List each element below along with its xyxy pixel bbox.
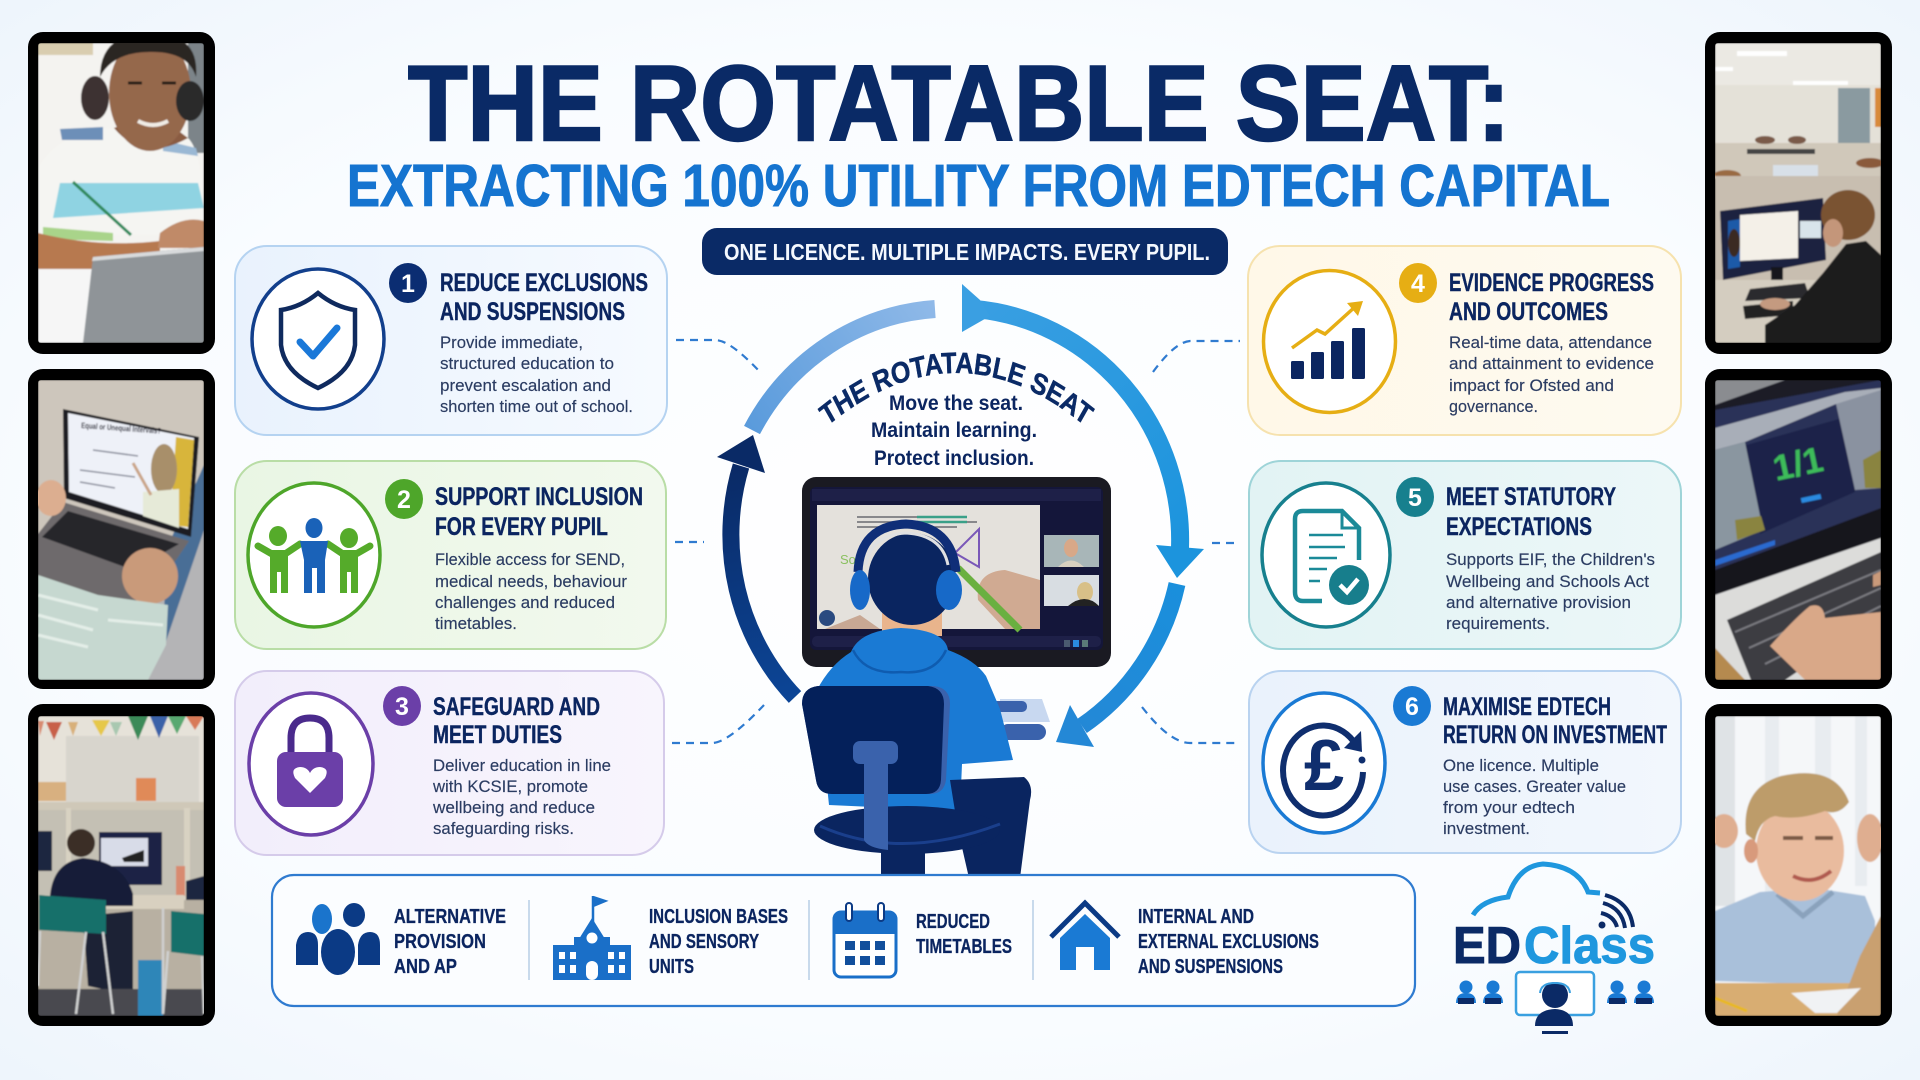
label: AND SUSPENSIONS [1138, 956, 1283, 978]
body text: use cases. Greater value [1443, 777, 1626, 796]
lesson video: Sol [840, 552, 859, 567]
heading: AND SUSPENSIONS [440, 298, 625, 326]
icon: padlock with heart [249, 693, 373, 835]
heading [433, 693, 600, 749]
participant thumbnails [1044, 535, 1099, 606]
body text: Supports EIF, the Children's [1446, 550, 1655, 569]
wordmark: Class [1524, 917, 1655, 975]
number badge 6 [1393, 686, 1431, 726]
arrow: top-right arc [962, 284, 1204, 578]
panel: edtech return [1249, 671, 1681, 853]
photo: smiling boy [1705, 704, 1892, 1026]
centre message: Protect inclusion. [874, 447, 1034, 470]
arrow: left dark arc [717, 435, 795, 697]
label: AND SENSORY [649, 931, 759, 953]
hoodie [817, 628, 1013, 811]
screen and pupil figures [1456, 972, 1654, 1034]
label [394, 906, 506, 978]
body text [1449, 333, 1654, 416]
heading: MAXIMISE EDTECH [1443, 693, 1611, 721]
rotation ring arrows [717, 284, 1204, 747]
body text: challenges and reduced [435, 593, 615, 612]
panel: reduce exclusions [235, 246, 667, 435]
body text: wellbeing and reduce [432, 798, 595, 817]
number badge 4 [1399, 263, 1437, 303]
body text: timetables. [435, 614, 517, 633]
body text: medical needs, behaviour [435, 572, 627, 591]
number badge 1 [389, 263, 427, 303]
heading [440, 269, 648, 326]
curved heading: THE ROTATABLE SEAT [818, 352, 1095, 423]
heading [435, 483, 643, 541]
cloud outline [1473, 864, 1600, 915]
number badge 3: 3 [395, 693, 409, 721]
desk items [990, 699, 1050, 740]
photo: laptop showing quiz score [1705, 369, 1892, 689]
body text [440, 333, 633, 416]
body text: Deliver education in line [433, 756, 611, 775]
title: THE ROTATABLE SEAT: [408, 43, 1510, 163]
strapline pill [702, 228, 1228, 275]
icon: document with tick [1262, 483, 1390, 627]
icon: school [553, 896, 631, 980]
headset and head [850, 524, 962, 625]
arrow: top-left light arc [752, 309, 935, 430]
label [649, 906, 788, 978]
wordmark: ED [1453, 917, 1521, 975]
subtitle: EXTRACTING 100% UTILITY FROM EDTECH CAPITAL [347, 153, 1610, 219]
label: INCLUSION BASES [649, 906, 788, 928]
body text: governance. [1449, 397, 1538, 416]
body text [432, 756, 611, 838]
heading [1449, 269, 1654, 326]
panel: use-case strip [272, 875, 1415, 1006]
label: ALTERNATIVE [394, 906, 506, 928]
icon: calendar [834, 903, 896, 977]
legs and seat [950, 777, 1031, 878]
label: UNITS [649, 956, 694, 978]
icon: group of people [296, 903, 380, 975]
body text: shorten time out of school. [440, 397, 633, 416]
heading: MEET DUTIES [433, 721, 562, 749]
label: EXTERNAL EXCLUSIONS [1138, 931, 1319, 953]
icon: shield [252, 269, 384, 409]
label: TIMETABLES [916, 936, 1012, 958]
wordmark [1453, 917, 1655, 975]
photo: computer room [1705, 32, 1892, 354]
body text: from your edtech [1443, 798, 1575, 817]
logo: EDClass [1453, 864, 1655, 1034]
chair back [802, 686, 950, 794]
body text: One licence. Multiple [1443, 756, 1599, 775]
centre message: Move the seat. [889, 392, 1023, 415]
body text [1443, 756, 1626, 838]
body text [1446, 550, 1655, 633]
arrow: lower-right arc [1056, 584, 1177, 747]
lesson video [817, 505, 1040, 630]
panel: safeguard [235, 671, 664, 855]
panel: support inclusion [235, 461, 666, 649]
body text: Flexible access for SEND, [435, 550, 625, 569]
body text: Provide immediate, [440, 333, 583, 352]
pupil from behind [802, 524, 1050, 878]
heading: EVIDENCE PROGRESS [1449, 269, 1654, 297]
heading: EXPECTATIONS [1446, 513, 1592, 541]
body text: safeguarding risks. [433, 819, 574, 838]
body text: investment. [1443, 819, 1530, 838]
photo: laptop showing quiz score: 1/1 [1769, 438, 1827, 489]
neck [882, 612, 942, 636]
body text: and alternative provision [1446, 593, 1631, 612]
dashed connectors [672, 340, 1240, 743]
body text: structured education to [440, 354, 614, 373]
body text: prevent escalation and [440, 376, 611, 395]
label: REDUCED [916, 911, 990, 933]
panel: evidence progress [1248, 246, 1681, 435]
number badge 5: 5 [1408, 484, 1422, 512]
number badge 2 [385, 479, 423, 519]
label: PROVISION [394, 931, 486, 953]
heading: RETURN ON INVESTMENT [1443, 721, 1667, 749]
centre message: Maintain learning. [871, 419, 1037, 442]
number badge 5 [1396, 477, 1434, 517]
number badge 3 [383, 686, 421, 726]
heading: REDUCE EXCLUSIONS [440, 269, 648, 297]
label: INTERNAL AND [1138, 906, 1254, 928]
photo: boy with headphones [28, 32, 215, 354]
photo: pupil in school carrel [28, 704, 215, 1026]
heading: SUPPORT INCLUSION [435, 483, 643, 511]
photo: laptop lesson on sofa [28, 369, 215, 689]
heading: AND OUTCOMES [1449, 298, 1608, 326]
heading [1446, 483, 1616, 541]
wifi arcs [1598, 895, 1633, 928]
heading: FOR EVERY PUPIL [435, 513, 608, 541]
body text: and attainment to evidence [1449, 354, 1654, 373]
icon: pound with cycle arrow [1263, 693, 1385, 833]
body text [435, 550, 627, 633]
number badge 6: 6 [1405, 693, 1419, 721]
icon: pound with cycle arrow: £ [1304, 726, 1344, 806]
heading [1443, 693, 1667, 749]
photo: laptop lesson on sofa: Equal or Unequal Intervals? [81, 421, 161, 436]
icon: rising bar chart [1264, 270, 1396, 412]
icon: three pupils [248, 483, 380, 627]
number badge 4: 4 [1411, 270, 1425, 298]
number badge 1: 1 [401, 270, 415, 298]
strapline pill: ONE LICENCE. MULTIPLE IMPACTS. EVERY PUPIL. [724, 239, 1210, 265]
body text: with KCSIE, promote [432, 777, 588, 796]
body text: Real-time data, attendance [1449, 333, 1652, 352]
centre message [871, 392, 1037, 470]
heading: MEET STATUTORY [1446, 483, 1616, 511]
label: AND AP [394, 956, 457, 978]
body text: requirements. [1446, 614, 1550, 633]
label [1138, 906, 1319, 978]
body text: Wellbeing and Schools Act [1446, 572, 1649, 591]
tablet with live lesson [802, 477, 1111, 667]
panel: statutory expectations [1249, 461, 1681, 649]
body text: impact for Ofsted and [1449, 376, 1614, 395]
icon: house [1051, 903, 1119, 970]
label [916, 911, 1012, 958]
heading: SAFEGUARD AND [433, 693, 600, 721]
number badge 2: 2 [397, 486, 411, 514]
